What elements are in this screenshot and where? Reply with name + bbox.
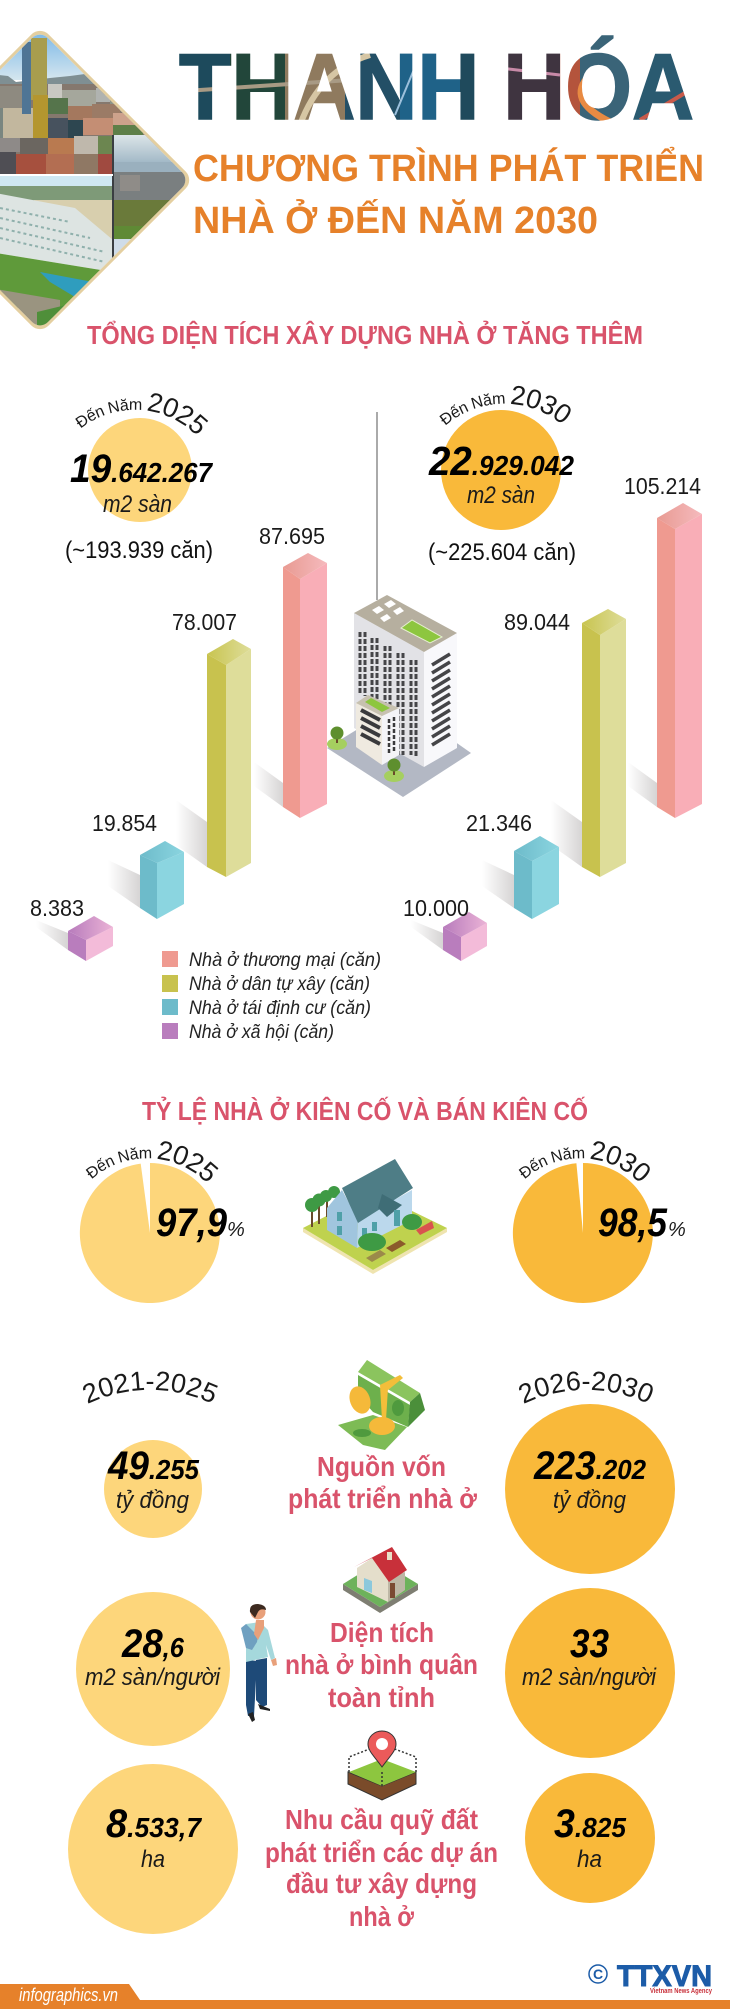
stat: land 2026-2030 (525, 1773, 655, 1903)
legend item: self-built: Nhà ở dân tự xây (căn) (189, 974, 370, 995)
stat: 2025 total: 19.642.267 (70, 447, 213, 491)
stat: 2030 total: 22.929.042 (428, 438, 574, 484)
stat: 2025 total (65, 393, 213, 564)
bar: social housing 2030: 10.000 (403, 895, 469, 921)
stat: land 2026-2030: 3.825 (554, 1802, 626, 1846)
bar: commercial 2025 (254, 523, 327, 818)
footer bar: infographics.vn (19, 1985, 118, 2005)
label: average floor area: Diện tích (330, 1617, 434, 1648)
label: average floor area: nhà ở bình quân (285, 1649, 478, 1680)
label: land fund demand: đầu tư xây dựng (286, 1868, 477, 1899)
heading: total floor area: TỔNG DIỆN TÍCH XÂY DỰNG NHÀ Ở TĂNG THÊM (87, 319, 643, 350)
period label: 2026-2030: 2026-2030 (519, 1372, 653, 1404)
label: housing capital (288, 1451, 477, 1514)
logo: TTXVN: TTXVN (617, 1960, 712, 1993)
legend item: commercial: Nhà ở thương mại (căn) (189, 950, 381, 971)
label: average floor area (285, 1617, 478, 1713)
stat: floor area 2026-2030 (505, 1588, 675, 1758)
stat: capital 2021-2025: tỷ đồng (116, 1487, 190, 1514)
stat: floor area 2026-2030: m2 sàn/người (522, 1664, 657, 1691)
heading: permanent housing rate: TỶ LỆ NHÀ Ở KIÊN CỐ VÀ BÁN KIÊN CỐ (142, 1095, 588, 1126)
label: housing capital: phát triển nhà ở (288, 1483, 477, 1514)
stat: capital 2026-2030 (505, 1404, 675, 1574)
pie chart: 2030: 98,5 (598, 1201, 668, 1245)
icon: red roof house (343, 1547, 418, 1613)
legend (162, 950, 381, 1043)
label: land fund demand: phát triển các dự án (265, 1837, 498, 1868)
label: land fund demand (265, 1804, 498, 1932)
label: housing capital: Nguồn vốn (317, 1451, 446, 1482)
bar: commercial 2030: 105.214 (624, 473, 701, 499)
stat: capital 2021-2025 (104, 1440, 202, 1538)
stat: capital 2021-2025: 49.255 (107, 1444, 199, 1488)
photo collage diamond (0, 30, 190, 330)
period label: 2021-2025: 2021-2025 (83, 1372, 218, 1404)
stat: floor area 2021-2025: 28,6 (121, 1622, 184, 1666)
logo: TTXVN: C (593, 1966, 603, 1982)
bar: self-built 2030: 89.044 (504, 609, 570, 635)
pie chart: 2025 (80, 1141, 245, 1303)
stat: 2030 total (428, 386, 576, 566)
legend item: social: Nhà ở xã hội (căn) (189, 1022, 334, 1043)
stat: floor area 2021-2025: m2 sàn/người (85, 1664, 221, 1691)
legend item: resettlement: Nhà ở tái định cư (căn) (189, 998, 371, 1019)
stat: floor area 2026-2030: 33 (570, 1622, 609, 1666)
bar: resettlement 2025 (92, 810, 184, 919)
bar: resettlement 2025: 19.854 (92, 810, 157, 836)
bar: commercial 2030 (624, 473, 702, 818)
stat: capital 2026-2030: tỷ đồng (553, 1487, 627, 1514)
logo: TTXVN: Vietnam News Agency (650, 1988, 712, 1995)
bar chart: 2030 (403, 473, 702, 961)
footer bar (0, 1984, 730, 2009)
bar: self-built 2025: 78.007 (172, 609, 237, 635)
bar: social housing 2025 (30, 895, 113, 961)
icon: suburban house (303, 1159, 447, 1274)
subtitle line 1: CHƯƠNG TRÌNH PHÁT TRIỂN (193, 145, 704, 190)
bar: commercial 2025: 87.695 (259, 523, 325, 549)
icon: thinking man (241, 1604, 277, 1722)
icon: apartment tower (327, 412, 471, 797)
pie chart: 2030: % (668, 1219, 686, 1241)
bar: self-built 2025 (172, 609, 251, 877)
subtitle line 2: NHÀ Ở ĐẾN NĂM 2030 (193, 198, 598, 242)
stat: floor area 2021-2025 (76, 1592, 230, 1746)
bar: social housing 2025: 8.383 (30, 895, 84, 921)
stat: 2030 total: m2 sàn (467, 482, 535, 509)
label: land fund demand: nhà ở (349, 1901, 414, 1932)
stat: land 2021-2025 (68, 1764, 238, 1934)
stat: 2025 total: m2 sàn (103, 491, 172, 518)
pie chart: 2030 (512, 1141, 686, 1303)
stat: 2025 total: Đến Năm 2025 (75, 393, 208, 434)
stat: land 2021-2025: 8.533,7 (106, 1802, 202, 1846)
bar: resettlement 2030 (466, 810, 559, 919)
stat: 2030 total: Đến Năm 2030 (439, 386, 571, 425)
pie chart: 2025: % (227, 1219, 245, 1241)
pie chart: 2030: Đến Năm 2030 (518, 1141, 650, 1181)
title: Thanh Hóa: THANH HÓA (179, 34, 694, 139)
icon: money stack (338, 1360, 425, 1450)
label: land fund demand: Nhu cầu quỹ đất (285, 1804, 478, 1835)
stat: land 2026-2030: ha (577, 1846, 602, 1873)
stat: capital 2026-2030: 223.202 (533, 1444, 646, 1488)
pie chart: 2025: 97,9 (156, 1201, 228, 1245)
stat: land 2021-2025: ha (141, 1846, 165, 1873)
label: average floor area: toàn tỉnh (328, 1682, 435, 1713)
stat: 2030 total: (~225.604 căn) (428, 539, 576, 566)
stat: 2025 total: (~193.939 căn) (65, 537, 213, 564)
bar: social housing 2030 (403, 895, 487, 961)
bar chart: 2025 (30, 523, 327, 961)
pie chart: 2025: Đến Năm 2025 (86, 1141, 218, 1181)
icon: land location pin (348, 1731, 416, 1800)
bar: self-built 2030 (504, 609, 626, 877)
bar: resettlement 2030: 21.346 (466, 810, 532, 836)
